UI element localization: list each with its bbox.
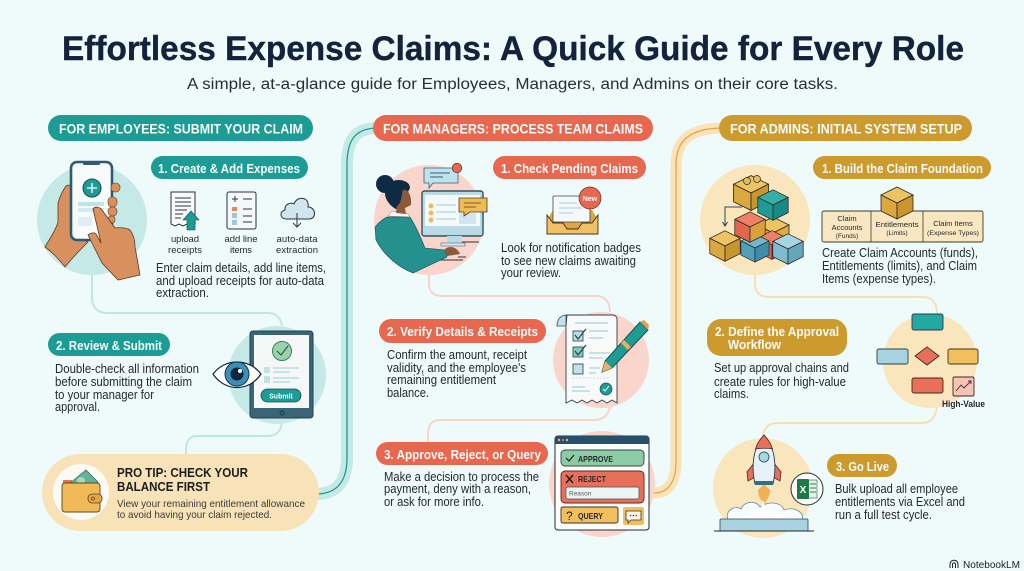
icon labels: auto-data <box>276 234 318 245</box>
icon labels: receipts <box>168 245 202 256</box>
callout: pro tip: BALANCE FIRST <box>117 479 210 494</box>
connector: employees to managers <box>316 128 378 494</box>
text: go live description: entitlements via Excel and <box>835 495 965 509</box>
text: verify description: remaining entitlement <box>387 373 496 387</box>
icon labels: add line <box>224 234 258 245</box>
flow lines between steps <box>92 273 937 455</box>
panel: managers <box>373 115 655 537</box>
button: approve: APPROVE <box>578 454 613 464</box>
diagram: claim foundation: Claim Items <box>933 219 973 228</box>
text: workflow description: Set up approval chains and <box>714 361 849 375</box>
text: foundation description: Create Claim Accounts (funds), <box>822 246 978 260</box>
text: step 1 description: Enter claim details, add line items, <box>156 261 326 275</box>
step heading: review and submit <box>48 333 170 356</box>
icon: add line items <box>227 192 256 229</box>
button: reject <box>561 471 644 503</box>
illustration: manager at computer <box>374 163 487 275</box>
text: check pending description: Look for notification badges <box>501 241 641 255</box>
subtitle: A simple, at-a-glance guide for Employees, Managers, and Admins on their core tasks. <box>187 76 838 93</box>
illustration: decision panel <box>549 431 655 537</box>
illustration: building blocks <box>700 165 810 275</box>
text: step 2 description: to your manager for <box>55 388 154 402</box>
notebooklm watermark: NotebookLM <box>963 559 1020 571</box>
text: check pending description: your review. <box>501 266 561 280</box>
illustration: tablet and eye <box>213 326 326 424</box>
diagram: claim foundation: (Expense Types) <box>927 230 979 237</box>
step heading: build foundation <box>813 156 991 179</box>
callout: pro tip <box>42 454 319 531</box>
text: step 2 description: Double-check all information <box>55 362 199 376</box>
icon labels: extraction <box>276 245 318 256</box>
heading: admins: FOR ADMINS: INITIAL SYSTEM SETUP <box>730 120 962 136</box>
text: step 1 description: extraction. <box>156 286 209 300</box>
step heading: define workflow <box>707 319 847 356</box>
callout: pro tip: to avoid having your claim rejected. <box>117 509 272 521</box>
title: Effortless Expense Claims: A Quick Guide for Every Role <box>62 30 964 68</box>
step heading: build foundation: 1. Build the Claim Foundation <box>822 161 983 176</box>
diagram: claim foundation <box>822 187 983 242</box>
step heading: create and add expenses <box>151 156 308 179</box>
heading: managers <box>373 115 653 141</box>
icon: inbox with new badge <box>547 187 601 234</box>
heading: admins <box>719 115 972 141</box>
text: verify description <box>387 348 527 400</box>
panel: employees <box>37 115 326 531</box>
text: foundation description: Items (expense types). <box>822 272 936 286</box>
illustration: workflow diagram: High-Value <box>942 399 985 409</box>
icon labels: items <box>230 245 252 256</box>
step heading: define workflow: 2. Define the Approval <box>715 324 839 339</box>
text: step 2 description <box>55 362 199 414</box>
icon: cloud extraction <box>281 198 315 227</box>
panel: admins <box>700 115 991 538</box>
step heading: verify details: 2. Verify Details & Receipts <box>387 324 538 339</box>
text: foundation description: Entitlements (limits), and Claim <box>822 259 977 273</box>
text: verify description: balance. <box>387 386 429 400</box>
step heading: verify details <box>379 319 546 343</box>
text: verify description: validity, and the employee's <box>387 361 526 375</box>
icon: upload receipts <box>171 192 199 230</box>
icon: chat <box>623 507 644 525</box>
button: reject: Reason <box>569 490 592 498</box>
button: reject: REJECT <box>578 474 607 484</box>
button: query: QUERY <box>578 511 603 521</box>
text: workflow description <box>714 361 849 401</box>
text: verify description: Confirm the amount, receipt <box>387 348 527 362</box>
step heading: approve reject query: 3. Approve, Reject, or Query <box>384 447 542 462</box>
button: query <box>561 507 618 523</box>
diagram: claim foundation: Accounts <box>832 223 863 232</box>
step heading: check pending claims <box>493 156 646 179</box>
text: step 2 description: approval. <box>55 400 100 414</box>
illustration: rocket launch <box>713 435 823 538</box>
step heading: define workflow: Workflow <box>728 337 782 352</box>
step heading: approve reject query <box>376 442 548 465</box>
illustration: hands holding phone <box>37 162 147 280</box>
icon: inbox with new badge: New <box>583 196 598 203</box>
heading: employees <box>48 115 313 141</box>
illustration: tablet and eye: Submit <box>269 394 294 400</box>
button: query: ? <box>566 509 573 523</box>
text: step 2 description: before submitting the claim <box>55 375 192 389</box>
icon: excel: X <box>800 485 807 496</box>
diagram: claim foundation: Claim <box>837 214 857 223</box>
step heading: go live <box>827 454 897 477</box>
text: check pending description: to see new claims awaiting <box>501 254 636 268</box>
heading: managers: FOR MANAGERS: PROCESS TEAM CLAIMS <box>383 120 643 136</box>
step heading: review and submit: 2. Review & Submit <box>56 338 163 353</box>
step heading: create and add expenses: 1. Create & Add Expenses <box>158 161 300 176</box>
icon: wallet <box>53 464 109 520</box>
text: approve description: or ask for more info. <box>384 495 484 509</box>
text: workflow description: create rules for high-value <box>714 375 846 389</box>
diagram: claim foundation: Entitlements <box>876 220 919 229</box>
text: step 1 description <box>156 261 326 300</box>
illustration: checklist and pen <box>553 312 649 408</box>
text: check pending description <box>501 241 641 280</box>
callout: pro tip: View your remaining entitlement allowance <box>117 498 305 510</box>
connector: managers to admins <box>654 128 724 493</box>
text: foundation description <box>822 246 978 286</box>
text: go live description: run a full test cycle. <box>835 508 932 522</box>
text: workflow description: claims. <box>714 387 749 401</box>
text: approve description: payment, deny with a reason, <box>384 482 531 496</box>
icon: speech bubble <box>424 163 462 188</box>
text: go live description <box>835 482 965 522</box>
text: approve description <box>384 470 539 509</box>
text: approve description: Make a decision to process the <box>384 470 539 484</box>
diagram: claim foundation: (Funds) <box>836 233 858 240</box>
text: go live description: Bulk upload all employee <box>835 482 958 496</box>
heading: employees: FOR EMPLOYEES: SUBMIT YOUR CLAIM <box>59 120 303 136</box>
text: step 1 description: and upload receipts for auto-data <box>156 274 324 288</box>
step heading: check pending claims: 1. Check Pending Claims <box>501 161 638 176</box>
icon labels: upload <box>171 234 199 245</box>
illustration: workflow diagram <box>877 314 985 409</box>
icon labels <box>168 234 318 256</box>
callout: pro tip: PRO TIP: CHECK YOUR <box>117 465 249 480</box>
diagram: claim foundation: (Limits) <box>886 230 908 237</box>
icon: yellow bubble <box>459 198 487 216</box>
step heading: go live: 3. Go Live <box>836 459 889 474</box>
